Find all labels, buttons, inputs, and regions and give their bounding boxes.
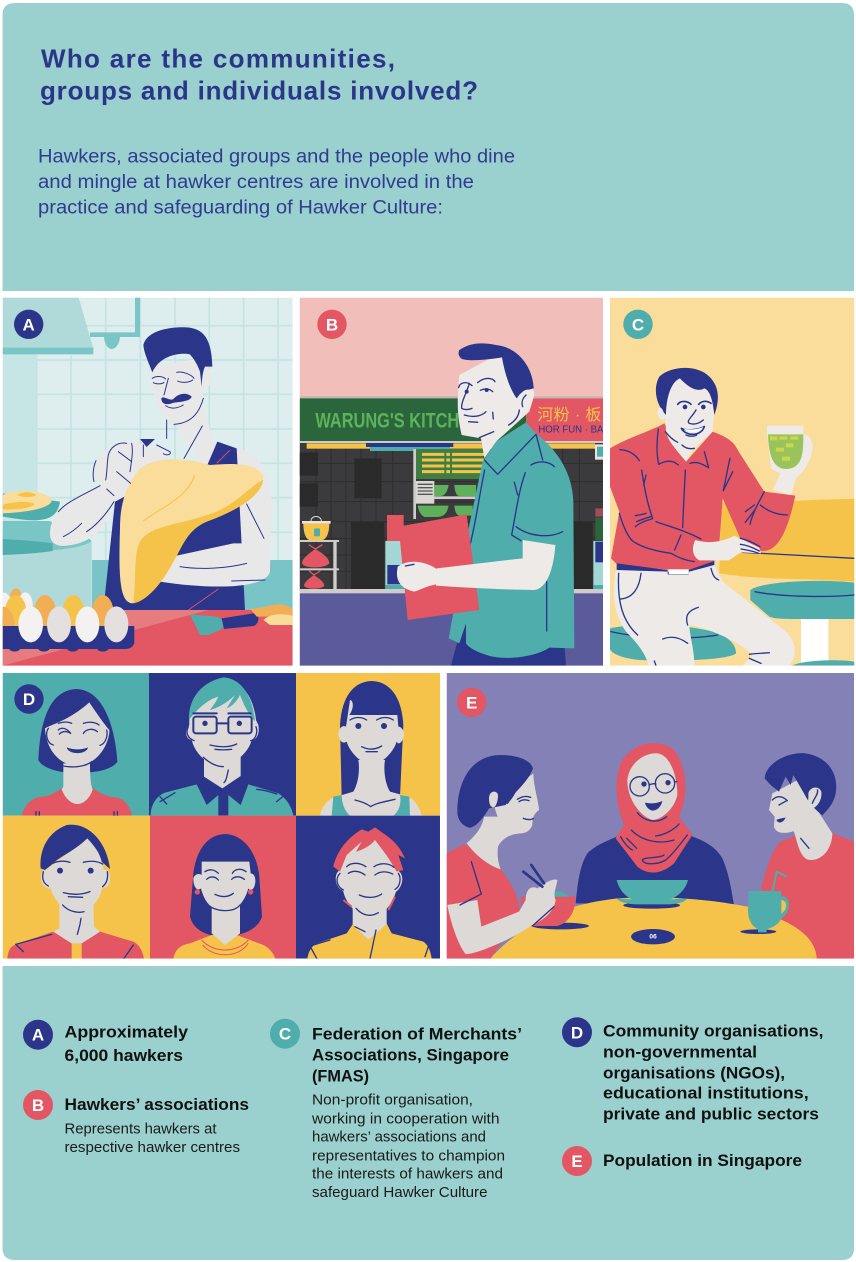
badge B: B xyxy=(326,315,338,334)
legend item C: C xyxy=(279,1025,291,1044)
portrait: woman with necklace xyxy=(150,816,296,959)
legend item B: B xyxy=(32,1096,44,1115)
panel A: hawker tossing dough xyxy=(0,298,293,666)
badge C: C xyxy=(632,315,644,334)
teal mug with straw xyxy=(748,872,789,932)
intro text: practice and safeguarding of Hawker Culture: xyxy=(38,198,443,218)
menu and green bowls xyxy=(413,449,484,519)
badge A: A xyxy=(23,315,35,334)
legend item D: organisations (NGOs), xyxy=(603,1063,785,1082)
extractor hood xyxy=(3,298,140,354)
signboard: HOR FUN · BAN xyxy=(538,425,610,436)
title: Who are the communities, xyxy=(41,44,395,74)
portrait: man with glasses xyxy=(149,673,296,816)
badge C xyxy=(623,310,653,339)
badge A xyxy=(14,310,43,339)
drink counters xyxy=(385,444,603,593)
drinks glass xyxy=(767,426,813,479)
man xyxy=(50,327,272,610)
legend item C xyxy=(270,1019,522,1201)
legend item C: Federation of Merchants’ xyxy=(312,1024,522,1044)
soup bowl xyxy=(617,880,688,904)
table: 90 xyxy=(649,932,657,939)
legend item B: Hawkers’ associations xyxy=(64,1095,249,1114)
legend item D: Community organisations, xyxy=(603,1021,824,1040)
seated man xyxy=(610,368,796,666)
portrait: red hair person xyxy=(296,816,440,959)
legend item E: E xyxy=(571,1152,583,1171)
tray of eggs xyxy=(0,588,134,651)
legend item D: educational institutions, xyxy=(603,1083,809,1102)
legend item B: Represents hawkers at xyxy=(64,1122,216,1138)
legend item E xyxy=(562,1146,802,1176)
legend item C: Associations, Singapore xyxy=(312,1046,509,1065)
legend item C: hawkers’ associations and xyxy=(312,1130,486,1146)
panel D: six community portraits xyxy=(3,673,440,959)
cooking pot and bread xyxy=(3,491,92,610)
legend item D xyxy=(562,1017,824,1123)
signboard: 河粉 · 板 xyxy=(537,406,601,424)
woman in headscarf xyxy=(576,743,734,905)
legend item A xyxy=(23,1020,189,1065)
intro text xyxy=(38,146,515,218)
legend item A: 6,000 hawkers xyxy=(64,1046,183,1065)
legend item E: Population in Singapore xyxy=(603,1151,802,1170)
signboard xyxy=(300,398,610,441)
legend panel xyxy=(2,966,854,1260)
panel C: FMAS representative xyxy=(610,298,854,666)
title: groups and individuals involved? xyxy=(40,76,478,106)
badge E: E xyxy=(466,693,477,712)
left diner xyxy=(447,755,576,959)
legend item C: Non-profit organisation, xyxy=(312,1093,473,1109)
panel B: hawkers' association representative xyxy=(300,298,610,666)
header panel xyxy=(2,3,854,291)
legend item A: A xyxy=(32,1026,44,1044)
legend item D: non-governmental xyxy=(603,1042,757,1061)
clipboard xyxy=(399,514,479,620)
panel E: diners at table xyxy=(447,673,854,959)
legend item A: Approximately xyxy=(64,1023,189,1042)
badge E xyxy=(457,688,486,717)
right diner xyxy=(759,753,854,959)
stall backdrop xyxy=(300,440,603,591)
legend item B xyxy=(23,1090,249,1156)
scraper xyxy=(190,614,224,635)
intro text: and mingle at hawker centres are involved in the xyxy=(38,172,474,193)
badge B xyxy=(317,310,347,339)
rice cooker and red bags xyxy=(300,516,339,590)
head xyxy=(152,358,204,425)
legend item C: representatives to champion xyxy=(312,1148,505,1164)
counter xyxy=(3,450,293,666)
portrait: teal background woman xyxy=(3,673,149,816)
portrait: young man yellow background xyxy=(3,816,150,959)
dough xyxy=(119,459,263,603)
table xyxy=(490,897,817,959)
badge D xyxy=(14,684,44,714)
signboard: WARUNG'S KITCHEN xyxy=(315,408,482,432)
badge D: D xyxy=(23,690,35,709)
legend item C: safeguard Hawker Culture xyxy=(312,1185,488,1201)
legend item D: private and public sectors xyxy=(603,1104,819,1123)
table and stools xyxy=(610,499,854,666)
man with clipboard xyxy=(397,343,574,666)
legend item C: working in cooperation with xyxy=(311,1111,500,1127)
legend item B: respective hawker centres xyxy=(64,1140,240,1156)
legend item C: the interests of hawkers and xyxy=(312,1167,503,1183)
portrait: long hair woman xyxy=(296,673,440,816)
title xyxy=(40,44,478,106)
legend item C: (FMAS) xyxy=(312,1067,369,1086)
intro text: Hawkers, associated groups and the people who dine xyxy=(38,146,515,168)
legend item D: D xyxy=(571,1023,583,1042)
